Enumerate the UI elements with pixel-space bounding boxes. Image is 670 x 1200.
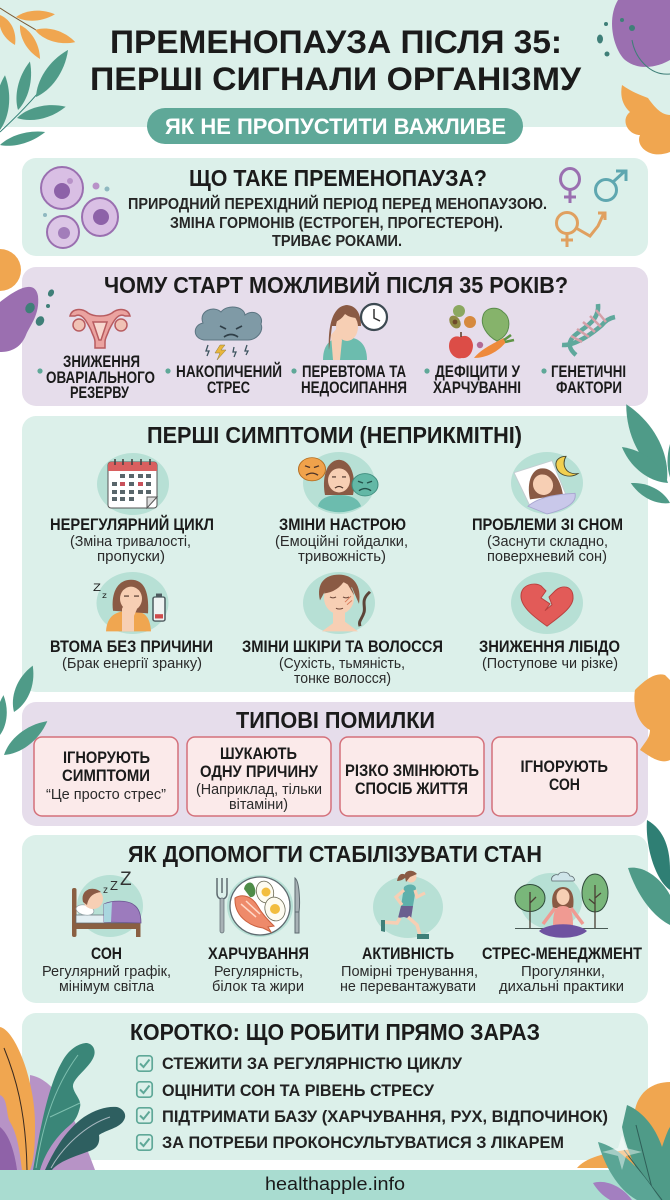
heading: ЯК ДОПОМОГТИ СТАБІЛІЗУВАТИ СТАН [128,841,542,867]
habit labels: ХАРЧУВАННЯ [208,945,309,963]
checklist [137,1054,608,1152]
cause labels: ХАРЧУВАННІ [433,379,521,397]
mistake card 4: ІГНОРУЮТЬ [520,758,608,776]
definition text [128,194,547,250]
habit labels: Регулярний графік, [42,963,171,980]
subtitle pill [147,108,523,144]
symptom labels row 1: пропуски) [97,548,165,565]
symptom labels row 2: (Поступове чи різке) [482,655,618,672]
icon: runner [373,871,443,939]
icon: sleep in bed: Z [110,878,118,893]
symptom labels row 1: поверхневий сон) [487,548,607,565]
decoration: right orange leaf 2 [634,674,670,761]
symptom labels row 2: (Брак енергії зранку) [62,655,202,672]
decoration: left teal leaves [0,663,52,761]
decoration: right teal leaves 2 [628,820,670,925]
icon: healthy food [447,305,514,358]
cause labels: ОВАРІАЛЬНОГО [46,369,155,387]
panel: how to stabilize [22,835,648,1003]
symptom labels row 1: (Емоційні гойдалки, [275,533,408,550]
cause labels: ГЕНЕТИЧНІ [551,363,626,381]
mistake card 1 [34,737,178,816]
mistake card 1: “Це просто стрес” [46,786,166,803]
checklist: ПІДТРИМАТИ БАЗУ (ХАРЧУВАННЯ, РУХ, ВІДПОЧИНОК) [162,1107,608,1126]
habit labels: білок та жири [212,978,304,995]
mistake card 2: ОДНУ ПРИЧИНУ [200,763,319,781]
symptom labels row 1: тривожність) [298,548,386,565]
heading: ЧОМУ СТАРТ МОЖЛИВИЙ ПІСЛЯ 35 РОКІВ? [104,271,568,298]
icon: meditation in nature [515,872,608,938]
cause labels: ЗНИЖЕННЯ [63,353,140,371]
mistake card 4: СОН [549,776,580,794]
mistake card 2 [187,737,331,816]
definition text: ЗМІНА ГОРМОНІВ (ЕСТРОГЕН, ПРОГЕСТЕРОН). [170,215,503,232]
cause labels: ДЕФІЦИТИ У [435,363,521,381]
habit labels: СТРЕС-МЕНЕДЖМЕНТ [482,945,642,963]
habit labels: АКТИВНІСТЬ [362,945,454,963]
mistake card 1: СИМПТОМИ [62,767,150,785]
habit labels: Регулярність, [214,963,303,980]
decoration: top-right blob [597,0,670,74]
cause labels: ФАКТОРИ [556,379,622,397]
icon: sleep in bed [72,869,143,937]
panel: why start after 35 [22,267,648,406]
symptom labels row 2: тонке волосся) [294,670,391,687]
panel: first symptoms [22,416,648,692]
title: ПРЕМЕНОПАУЗА ПІСЛЯ 35: [110,24,562,60]
heading: ТИПОВІ ПОМИЛКИ [236,707,435,733]
decoration: top-left leaves [0,8,77,150]
icon: broken heart [511,572,583,634]
cause labels: СТРЕС [207,379,250,397]
footer [0,1170,670,1200]
mistake card 2: (Наприклад, тільки [196,781,322,798]
symptom labels row 2: ЗНИЖЕННЯ ЛІБІДО [479,638,620,656]
symptom labels row 1: ПРОБЛЕМИ ЗІ СНОМ [472,516,623,534]
mistake card 3: СПОСІБ ЖИТТЯ [355,780,468,798]
definition text: ПРИРОДНИЙ ПЕРЕХІДНИЙ ПЕРІОД ПЕРЕД МЕНОПАУЗОЮ. [128,194,547,213]
icon: uterus [70,310,130,348]
icon: calendar [97,453,169,515]
habit labels: дихальні практики [499,978,624,995]
panel: what is premenopause [22,158,648,256]
icon: skin and hair changes [303,572,375,634]
habit labels: мінімум світла [59,978,155,995]
checklist: ОЦІНИТИ СОН ТА РІВЕНЬ СТРЕСУ [162,1081,434,1100]
symptom labels row 1: НЕРЕГУЛЯРНИЙ ЦИКЛ [50,515,214,534]
title [90,24,582,97]
mistake card 2: вітаміни) [229,796,288,813]
icon: tired woman with clock [323,304,387,360]
decoration: right teal leaves [616,399,670,509]
symptom labels row 1: ЗМІНИ НАСТРОЮ [279,516,406,534]
icon: sleep problems [511,452,583,514]
symptom labels row 2 [50,638,620,687]
decoration: left blobs [0,249,55,352]
icon: fatigue [93,572,168,634]
decoration: right orange leaf [621,85,670,154]
panel: typical mistakes [22,702,648,826]
icon: cells [41,167,118,248]
symptom labels row 1: (Заснути складно, [487,533,608,550]
mistake card 3 [340,737,484,816]
icon: mood swings [298,452,378,514]
habit labels: СОН [91,945,122,963]
icon: storm cloud [195,307,262,360]
heading: ПЕРШІ СИМПТОМИ (НЕПРИКМІТНІ) [147,422,522,448]
mistake card 1: ІГНОРУЮТЬ [63,749,150,767]
symptom labels row 1 [50,515,623,565]
cause labels: НЕДОСИПАННЯ [301,379,407,397]
habit labels: не перевантажувати [340,978,476,995]
subtitle pill: ЯК НЕ ПРОПУСТИТИ ВАЖЛИВЕ [165,114,506,139]
checklist: ЗА ПОТРЕБИ ПРОКОНСУЛЬТУВАТИСЯ З ЛІКАРЕМ [162,1133,564,1152]
icon: sleep in bed: z [103,885,108,896]
symptom labels row 2: ВТОМА БЕЗ ПРИЧИНИ [50,638,213,656]
mistake card 4 [492,737,637,816]
checklist: СТЕЖИТИ ЗА РЕГУЛЯРНІСТЮ ЦИКЛУ [162,1054,462,1073]
habit labels: Помірні тренування, [341,963,478,980]
cause labels [37,353,626,402]
definition text: ТРИВАЄ РОКАМИ. [272,233,402,250]
icon: fatigue: Z [93,581,102,594]
habit labels: Прогулянки, [521,963,605,980]
mistake card 2: ШУКАЮТЬ [220,745,297,763]
heading: КОРОТКО: ЩО РОБИТИ ПРЯМО ЗАРАЗ [130,1019,540,1045]
decoration: bottom-right plants [577,1082,670,1200]
icon: gender symbols [556,168,626,247]
icon: plate of food [217,875,300,937]
symptom labels row 1: (Зміна тривалості, [70,533,191,550]
habit labels [42,945,642,995]
cause labels: НАКОПИЧЕНИЙ [176,362,282,381]
symptom labels row 2: (Сухість, тьмяність, [279,655,405,672]
mistake card 3: РІЗКО ЗМІНЮЮТЬ [345,762,479,780]
title: ПЕРШІ СИГНАЛИ ОРГАНІЗМУ [90,61,582,97]
decoration: bottom-left plants [0,1027,125,1170]
symptom labels row 2: ЗМІНИ ШКІРИ ТА ВОЛОССЯ [242,638,443,656]
heading: ЩО ТАКЕ ПРЕМЕНОПАУЗА? [189,165,487,191]
panel: what to do now [22,1013,648,1160]
cause labels: РЕЗЕРВУ [70,384,130,402]
cause labels: ПЕРЕВТОМА ТА [302,363,406,381]
icon: sleep in bed: Z [120,869,132,890]
footer: healthapple.info [265,1174,405,1194]
icon: fatigue: z [102,590,107,600]
icon: DNA [562,304,615,355]
